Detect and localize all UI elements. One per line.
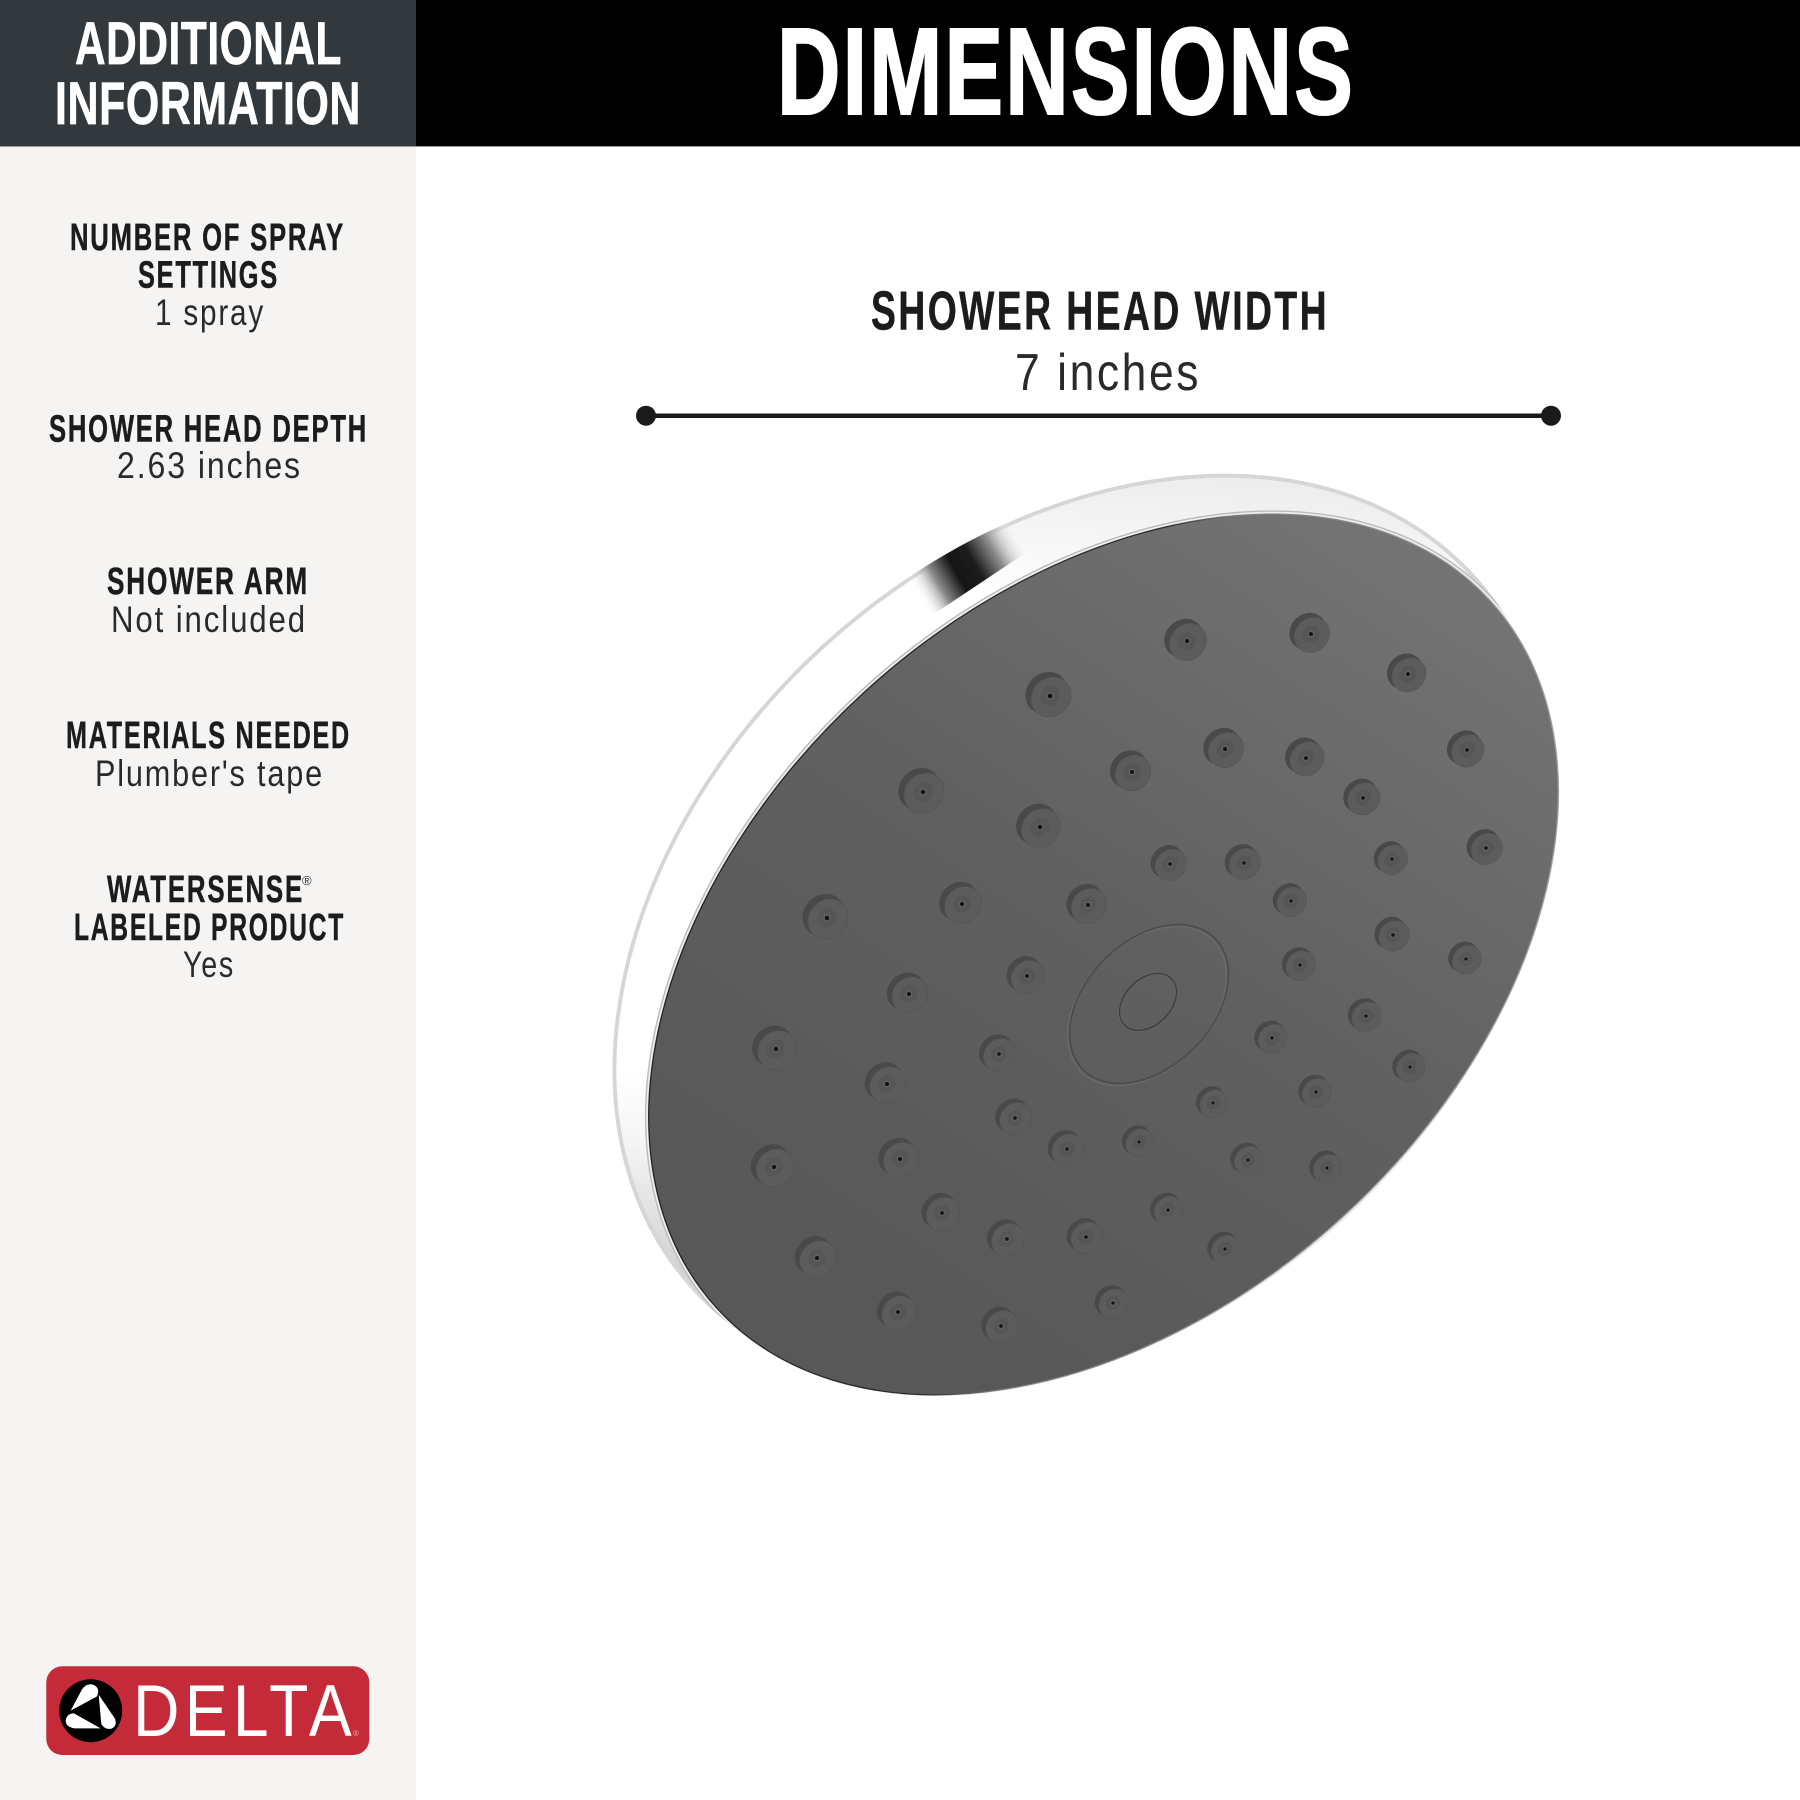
shower head illustration — [612, 474, 1560, 1396]
main header: dimensions title: DIMENSIONS — [777, 4, 1355, 141]
spec: number of spray settings: SETTINGS — [138, 254, 279, 296]
spec: number of spray settings: NUMBER OF SPRAY — [70, 217, 345, 259]
spec: number of spray settings: 1 spray — [155, 292, 265, 333]
Delta logo — [46, 1666, 369, 1755]
width label — [871, 280, 1329, 402]
chrome rim — [612, 474, 1513, 1333]
spec: shower arm: Not included — [111, 599, 307, 640]
spec: materials needed: Plumber's tape — [95, 753, 324, 794]
spray face — [476, 337, 1731, 1572]
width label: 7 inches — [1015, 344, 1201, 402]
Delta logo: ® — [353, 1729, 359, 1738]
spec: shower arm — [107, 561, 309, 640]
sidebar panel background — [0, 146, 416, 1800]
center hub — [1037, 894, 1259, 1116]
spec: watersense labeled product: LABELED PRODUCT — [74, 907, 345, 949]
Delta logo: DELTA — [133, 1671, 357, 1752]
spec: number of spray settings — [70, 217, 345, 333]
sidebar header: additional information: INFORMATION — [55, 70, 361, 137]
spec: watersense labeled product — [74, 869, 345, 985]
spec: watersense labeled product: WATERSENSE — [107, 869, 304, 911]
width dimension line — [636, 406, 1561, 426]
width label: SHOWER HEAD WIDTH — [871, 280, 1329, 342]
main header: dimensions title — [0, 0, 1800, 147]
spec: shower head depth: 2.63 inches — [117, 445, 302, 486]
spec: shower head depth — [49, 408, 368, 486]
spec: watersense labeled product: Yes — [183, 944, 235, 985]
spec: materials needed — [66, 715, 351, 794]
spec: watersense labeled product: ® — [302, 873, 312, 888]
sidebar header: additional information: ADDITIONAL — [75, 10, 342, 77]
spec: shower head depth: SHOWER HEAD DEPTH — [49, 408, 368, 450]
spray nozzles — [743, 605, 1509, 1350]
spec: materials needed: MATERIALS NEEDED — [66, 715, 351, 757]
spec: shower arm: SHOWER ARM — [107, 561, 309, 603]
sidebar header: additional information — [0, 0, 416, 146]
